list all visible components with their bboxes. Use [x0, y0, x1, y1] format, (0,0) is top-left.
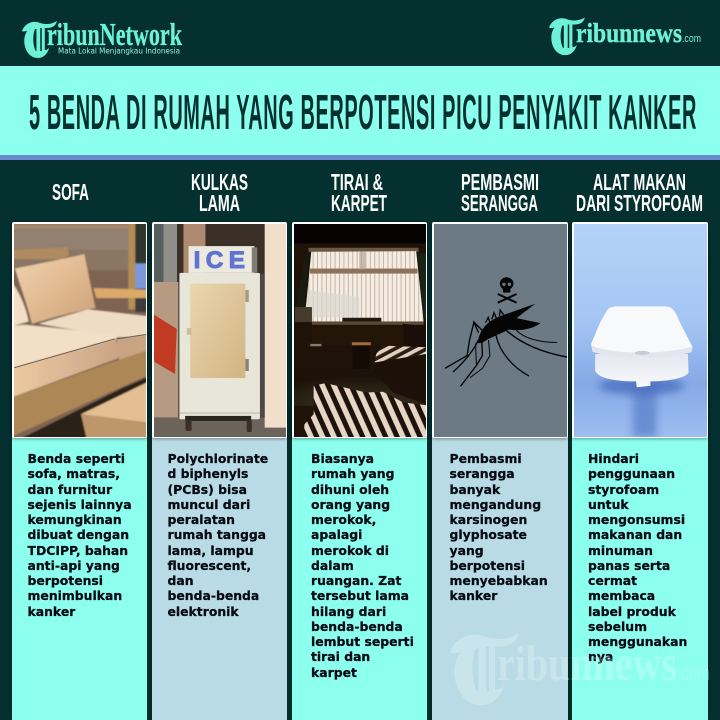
text: tirai dan karpet: orang yang	[311, 497, 390, 512]
text: tirai dan karpet: tirai dan	[311, 649, 370, 664]
text: tirai dan karpet: apalagi	[311, 527, 362, 542]
text: tirai dan karpet: rumah yang	[311, 466, 394, 481]
text: sofa: dibuat dengan	[28, 527, 129, 542]
watermark: Tribunnews: ribunnews	[497, 635, 677, 691]
watermark: Tribunnews	[450, 633, 710, 705]
title band	[0, 66, 720, 155]
panel: sofa text background	[12, 252, 147, 720]
text: styrofoam: Hindari	[588, 451, 639, 466]
text: styrofoam	[588, 451, 687, 664]
text: kulkas lama: lama, lampu	[168, 542, 254, 558]
text: styrofoam: untuk	[588, 497, 629, 512]
text: pembasmi serangga: berpotensi	[450, 558, 525, 573]
text: sofa: sejenis lainnya	[28, 497, 132, 512]
heading: tirai dan karpet: TIRAI &	[331, 169, 383, 195]
text: pembasmi serangga	[450, 451, 548, 603]
text: sofa: anti-api yang	[28, 558, 120, 573]
header and title text layer	[22, 16, 703, 216]
text: kulkas lama: fluorescent,	[168, 558, 251, 573]
text: sofa: TDCIPP, bahan	[28, 542, 128, 558]
text: styrofoam: minuman	[588, 542, 653, 558]
text: tirai dan karpet: benda-benda	[311, 619, 403, 634]
heading: kulkas lama: LAMA	[199, 190, 240, 216]
text: tirai dan karpet: dihuni oleh	[311, 482, 389, 496]
text: pembasmi serangga: menyebabkan	[450, 573, 548, 588]
logo: TribunNetwork: Mata Lokal Menjangkau Indonesia	[58, 46, 180, 56]
photo: curtain and carpet	[292, 222, 427, 438]
text: pembasmi serangga: kanker	[450, 588, 497, 603]
text: tirai dan karpet: karpet	[311, 664, 357, 680]
text: pembasmi serangga: glyphosate	[450, 527, 527, 542]
heading: pembasmi serangga: PEMBASMI	[461, 169, 539, 195]
text: kulkas lama: d biphenyls	[168, 466, 248, 481]
text: sofa: Benda seperti	[28, 451, 125, 466]
text: kulkas lama: elektronik	[168, 604, 239, 618]
text: styrofoam: cermat	[588, 573, 637, 588]
text: pembasmi serangga: yang	[450, 542, 484, 558]
logo: Tribunnews.com: ribunnews	[576, 18, 682, 48]
text: pembasmi serangga: serangga	[450, 466, 515, 481]
icon: mosquito	[445, 303, 566, 385]
photo: old fridge: ICE	[193, 246, 245, 273]
photo: old fridge	[152, 222, 287, 438]
text: kulkas lama	[168, 451, 268, 618]
text: kulkas lama: peralatan	[168, 512, 235, 527]
text: kulkas lama: muncul dari	[168, 497, 250, 512]
logo: TribunNetwork: ribunNetwork	[47, 16, 182, 52]
heading: kulkas lama: KULKAS	[191, 169, 248, 195]
icon: skull and crossbones	[497, 277, 516, 302]
heading: pembasmi serangga: SERANGGA	[461, 190, 538, 216]
text: sofa: dan furnitur	[28, 482, 112, 496]
text: tirai dan karpet	[311, 451, 414, 680]
text: kulkas lama: Polychlorinate	[168, 451, 268, 466]
text: styrofoam: panas serta	[588, 558, 670, 573]
text: styrofoam: styrofoam	[588, 482, 659, 496]
text: pembasmi serangga: banyak	[450, 482, 500, 496]
text: tirai dan karpet: dalam	[311, 558, 354, 573]
text: sofa: menimbulkan	[28, 588, 122, 603]
text: styrofoam: nya	[588, 649, 613, 664]
logo: Tribunnews.com	[549, 17, 701, 55]
text: tirai dan karpet: Biasanya	[311, 451, 374, 466]
heading: alat makan dari styrofoam	[576, 169, 703, 216]
text: styrofoam: mengonsumsi	[588, 512, 685, 527]
logo: TribunNetwork	[22, 16, 182, 58]
text: styrofoam: menggunakan	[588, 634, 687, 649]
panel: styrofoam text background	[572, 252, 708, 720]
text: tirai dan karpet: lembut seperti	[311, 634, 414, 649]
logo: Tribunnews.com: .com	[682, 33, 701, 45]
heading: sofa: SOFA	[52, 179, 89, 205]
text: styrofoam: membaca	[588, 588, 655, 603]
text: sofa: kemungkinan	[28, 512, 122, 527]
text: tirai dan karpet: merokok,	[311, 512, 376, 527]
text: kulkas lama: dan	[168, 573, 194, 588]
text: pembasmi serangga: Pembasmi	[450, 451, 522, 466]
watermark: Tribunnews: .com	[677, 663, 710, 685]
text: pembasmi serangga: karsinogen	[450, 512, 527, 527]
panel: kulkas text background	[152, 252, 287, 720]
panel: tirai text background	[292, 252, 427, 720]
heading: kulkas lama	[191, 169, 248, 216]
text: styrofoam: makanan dan	[588, 527, 682, 542]
text: tirai dan karpet: merokok di	[311, 542, 389, 558]
text: styrofoam: label produk	[588, 604, 676, 618]
text: sofa: sofa, matras,	[28, 466, 120, 481]
title underline band	[0, 155, 720, 160]
text: tirai dan karpet: hilang dari	[311, 604, 386, 618]
text: styrofoam: sebelum	[588, 619, 647, 634]
panel: pembasmi text background	[432, 252, 568, 720]
photo: insect spray	[432, 222, 568, 438]
text: tirai dan karpet: tersebut lama	[311, 588, 409, 603]
text: sofa: kanker	[28, 604, 75, 618]
photo: sofa	[12, 222, 147, 438]
heading: tirai dan karpet	[331, 169, 387, 216]
text: sofa: berpotensi	[28, 573, 103, 588]
text: styrofoam: penggunaan	[588, 466, 675, 481]
text: sofa	[27, 451, 132, 618]
photo: styrofoam container	[572, 222, 708, 438]
text: kulkas lama: (PCBs) bisa	[168, 482, 247, 496]
text: tirai dan karpet: ruangan. Zat	[311, 573, 401, 588]
text: kulkas lama: benda-benda	[168, 588, 259, 603]
text: kulkas lama: rumah tangga	[168, 527, 266, 542]
text: pembasmi serangga: mengandung	[450, 497, 541, 512]
heading: tirai dan karpet: KARPET	[331, 190, 387, 216]
heading: pembasmi serangga	[461, 169, 539, 216]
